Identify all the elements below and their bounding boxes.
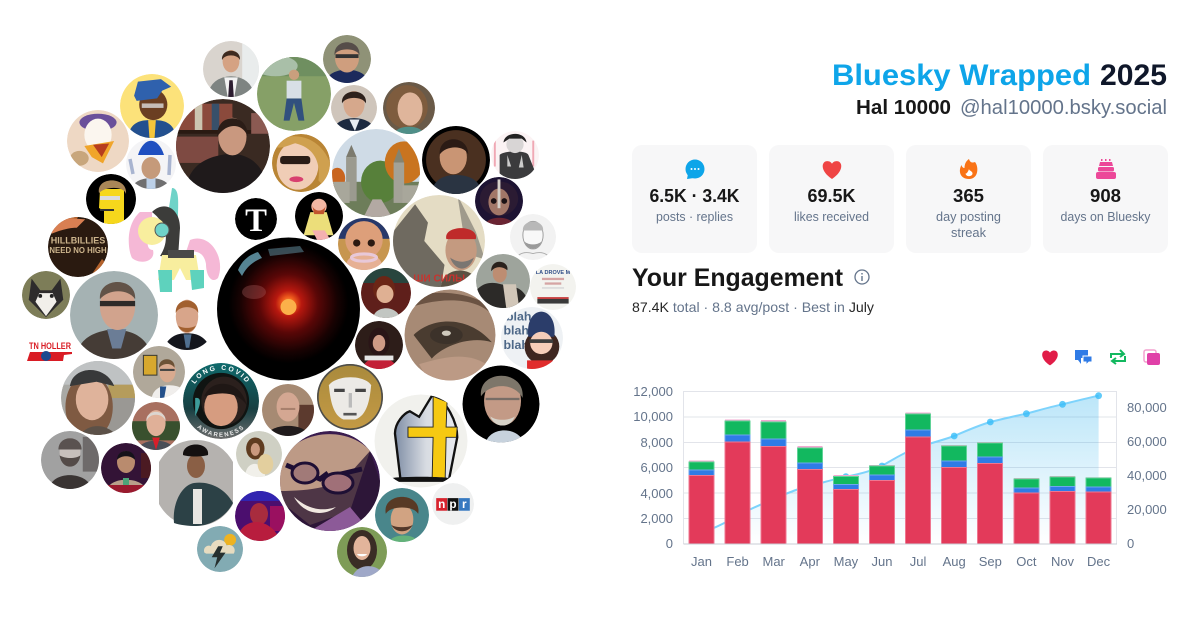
avatar: dark haired man lying xyxy=(476,254,530,308)
stat value: 908 xyxy=(1090,186,1121,206)
stat label: days on Bluesky xyxy=(1060,209,1151,224)
heading: your engagement: Your Engagement xyxy=(632,264,844,292)
avatar: long covid awareness badge: LONG COVID xyxy=(191,365,249,384)
month axis labels xyxy=(691,554,1111,569)
bar: Aug xyxy=(942,445,966,544)
avatar: curly haired man xyxy=(375,488,429,542)
header: user name and handle: @hal10000.bsky.social xyxy=(960,97,1167,119)
month axis labels: May xyxy=(834,554,859,569)
panel: stat card days on Bluesky xyxy=(1043,145,1168,253)
left axis labels: 0 xyxy=(666,536,673,551)
header: title: 2025 xyxy=(1100,59,1167,92)
stat label: likes received xyxy=(794,209,869,224)
avatar: close-up eye xyxy=(404,290,496,380)
avatar: hillbillies shirt: HILLBILLIES xyxy=(51,235,105,245)
logo: NPR: r xyxy=(462,498,467,511)
month axis labels: Apr xyxy=(800,554,821,569)
icon: cake xyxy=(1096,159,1116,179)
avatar: man in gray blazer xyxy=(70,271,158,359)
avatar: long covid awareness badge xyxy=(183,363,259,439)
left axis labels: 10,000 xyxy=(633,409,673,424)
icon: flame xyxy=(960,159,977,179)
panel: stat card posts and replies xyxy=(632,145,757,253)
month axis labels: Dec xyxy=(1087,554,1111,569)
month axis labels: Jan xyxy=(691,554,712,569)
avatar: New York Times logo: T xyxy=(245,203,267,239)
logo: NPR: n xyxy=(438,498,445,511)
logo: NPR xyxy=(432,483,474,525)
panel: avatar bubble cluster xyxy=(22,35,576,577)
left axis labels xyxy=(633,384,673,551)
avatar: duck cartoon xyxy=(67,110,129,172)
right axis labels xyxy=(1127,400,1167,551)
stat value: 6.5K · 3.4K xyxy=(650,186,740,206)
avatar: New York Times logo xyxy=(235,198,277,240)
logo: NPR: p xyxy=(449,498,457,511)
stat label: posts · replies xyxy=(656,209,733,224)
avatar: blah blah cartoon woman: blah xyxy=(503,338,529,352)
panel: stat card streak xyxy=(906,145,1031,253)
avatar: monochrome anime figure xyxy=(491,131,539,179)
logo: TN Holler: TN HOLLER xyxy=(29,341,71,352)
avatar: woman in cap xyxy=(61,361,135,439)
avatar: man in suit xyxy=(203,41,259,97)
bar: Jul xyxy=(906,412,930,544)
icon: replies xyxy=(1075,350,1092,365)
month axis labels: Aug xyxy=(943,554,966,569)
bar: Apr xyxy=(798,446,822,544)
avatar: woman with dog xyxy=(236,431,282,477)
avatar: man on purple TV set xyxy=(101,443,151,493)
avatar: cartoon man on yellow xyxy=(120,74,184,138)
avatar: blonde woman with glasses xyxy=(272,134,330,192)
bar: Feb xyxy=(725,420,750,544)
avatar: book poster xyxy=(530,264,576,310)
avatar: man with purple-toned selfie xyxy=(280,431,380,531)
left axis labels: 6,000 xyxy=(640,460,673,475)
avatar: woman with brown hair xyxy=(383,82,435,134)
avatar: woman on red TV set xyxy=(355,321,403,369)
cumulative line points xyxy=(842,392,1102,480)
right axis labels: 20,000 xyxy=(1127,502,1167,517)
icon: likes xyxy=(1042,350,1058,365)
avatar: long covid awareness badge: AWARENESS xyxy=(197,425,244,437)
left axis labels: 2,000 xyxy=(640,511,673,526)
cumulative area xyxy=(702,396,1099,544)
avatar: man with bookshelves xyxy=(176,99,270,193)
panel: stat card streak: streak xyxy=(951,225,986,240)
month axis labels: Sep xyxy=(979,554,1002,569)
bar: Dec xyxy=(1086,477,1111,544)
avatar: toddler on red blanket xyxy=(361,268,411,318)
left axis labels: 8,000 xyxy=(640,435,673,450)
avatar: woman's face illustration in gold xyxy=(317,364,383,430)
avatar: hillbillies shirt xyxy=(48,217,108,277)
avatar: bald older man xyxy=(262,384,314,436)
avatar: storm cloud icon xyxy=(197,526,243,572)
bar: Oct xyxy=(1014,478,1039,544)
panel: stat card likes xyxy=(769,145,894,253)
icon: chat bubble xyxy=(686,160,704,179)
month axis labels: Feb xyxy=(726,554,749,569)
avatar: man with glasses, top xyxy=(323,35,371,83)
avatar: husky xyxy=(22,271,70,319)
avatar: smiling woman xyxy=(337,527,387,577)
left axis labels: 4,000 xyxy=(640,486,673,501)
stacked bars xyxy=(689,412,1111,544)
cumulative line xyxy=(702,396,1099,533)
avatar: HAL 9000 eye xyxy=(217,238,360,380)
avatar: older man with glasses on black xyxy=(462,366,540,442)
stat value: 69.5K xyxy=(808,186,856,206)
avatar: hillbillies shirt: NEED NO HIGH xyxy=(49,246,107,255)
avatar: blah blah cartoon woman: blah xyxy=(506,310,531,324)
chart: monthly engagement stacked bars with cumulative line xyxy=(633,384,1167,569)
avatar: man in field xyxy=(253,56,331,131)
avatar: man with black ring xyxy=(422,126,490,194)
bar: Mar xyxy=(761,420,786,544)
avatar: woman in green jacket xyxy=(159,440,233,526)
month axis labels: Mar xyxy=(763,554,786,569)
header: title: Bluesky Wrapped xyxy=(832,59,1091,92)
avatar: man with red tie xyxy=(132,402,180,450)
avatar: yellow cartoon on black xyxy=(86,174,136,224)
stat label: day posting xyxy=(936,209,1001,224)
month axis labels: Oct xyxy=(1016,554,1037,569)
bar: Jan xyxy=(689,460,714,544)
bar: Jun xyxy=(870,465,894,544)
bar: May xyxy=(834,475,858,544)
logo: TN Holler xyxy=(27,341,72,361)
avatar: blah blah cartoon woman xyxy=(501,307,563,369)
text: engagement summary: 87.4K total · 8.8 avg/post · Best in July xyxy=(632,299,874,315)
legend icons xyxy=(1042,350,1160,365)
avatar: pencil sketch xyxy=(510,214,556,260)
avatar: man in party hat xyxy=(126,139,176,189)
avatar: man with red cap on poster: ШИ СИЛЫ xyxy=(413,273,465,284)
avatar: woman in purple light xyxy=(235,491,285,541)
right axis labels: 0 xyxy=(1127,536,1134,551)
avatar: blah blah cartoon woman: blah xyxy=(503,323,529,337)
header: user name and handle: Hal 10000 xyxy=(856,97,951,119)
right axis labels: 60,000 xyxy=(1127,434,1167,449)
icon: heart xyxy=(823,161,841,179)
avatar: bishop mitre xyxy=(374,394,468,488)
icon: reposts xyxy=(1111,350,1125,364)
right axis labels: 40,000 xyxy=(1127,468,1167,483)
avatar: book poster: LA DROVE M xyxy=(536,270,571,276)
avatar: skull makeup xyxy=(475,177,523,225)
avatar: bearded gray drawing xyxy=(41,431,99,489)
month axis labels: Jul xyxy=(910,554,927,569)
stat value: 365 xyxy=(953,186,984,206)
icon: quotes xyxy=(1144,350,1160,365)
avatar: kewpie doll xyxy=(338,218,390,270)
left axis labels: 12,000 xyxy=(633,384,673,399)
avatar: pony illustration xyxy=(129,188,220,292)
bar: Nov xyxy=(1050,476,1075,544)
month axis labels: Nov xyxy=(1051,554,1075,569)
avatar: man with red cap on poster xyxy=(393,195,485,287)
avatar: young man in suit xyxy=(331,85,377,131)
avatar: doctor with poster xyxy=(133,346,185,398)
icon: info xyxy=(855,270,869,284)
avatar: autumn gate xyxy=(329,129,424,217)
avatar: bald cartoon in yellow xyxy=(295,192,343,240)
avatar: young red-haired man xyxy=(167,300,207,350)
header: user name and handle xyxy=(856,97,1167,119)
month axis labels: Jun xyxy=(872,554,892,569)
bar: Sep xyxy=(978,442,1002,544)
right axis labels: 80,000 xyxy=(1127,400,1167,415)
